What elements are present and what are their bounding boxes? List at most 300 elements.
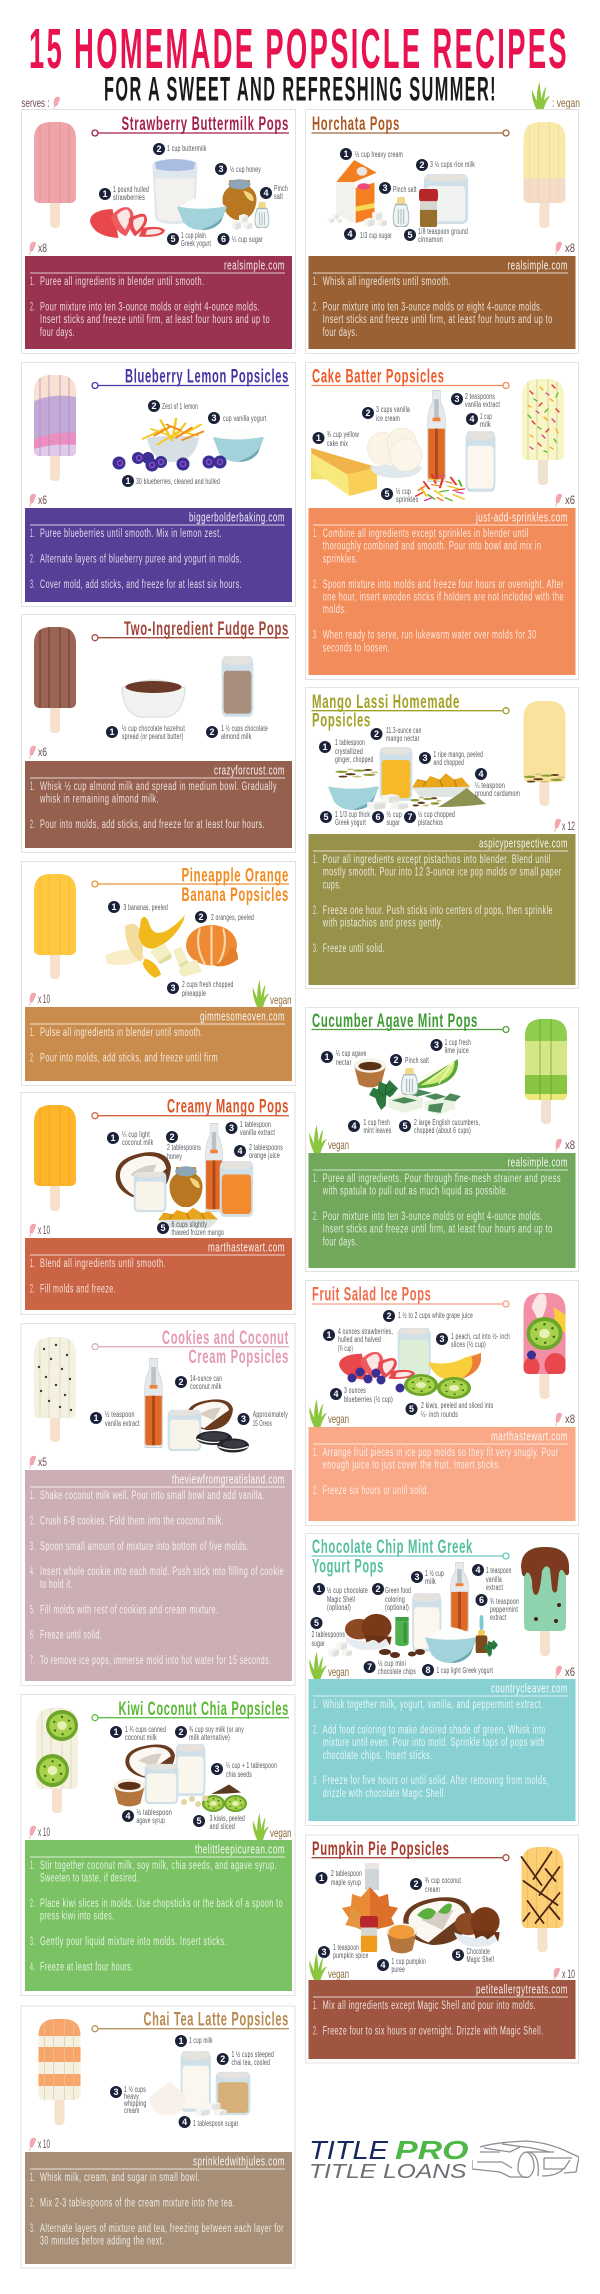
ingredient illustration	[122, 656, 253, 717]
ingredient 1	[110, 1725, 166, 1742]
heading	[92, 113, 289, 136]
ingredient 4: 1/3 cup sugar	[360, 231, 392, 240]
vegan tag: vegan	[328, 1967, 349, 1981]
ingredient 4: 3 ounces	[344, 1386, 366, 1395]
ingredient 2: milk alternative)	[189, 1733, 230, 1742]
ingredient 2: (optional)	[385, 1603, 409, 1612]
instructions: 1.	[30, 1027, 35, 1039]
heading: Pineapple Orange	[182, 865, 289, 887]
instructions: Alternate layers of mixture and tea, freezing between each layer for	[40, 2223, 284, 2235]
instructions: Puree blueberries until smooth. Mix in lemon zest.	[40, 528, 222, 540]
heading	[92, 2009, 289, 2032]
ingredient 3: 3	[218, 164, 224, 174]
ingredient 3: pumpkin spice	[333, 1951, 369, 1960]
ingredient 5	[404, 227, 468, 244]
ingredient 4: salt	[274, 192, 283, 201]
heading	[92, 1327, 289, 1368]
ingredient 2: 2	[393, 1055, 399, 1065]
instructions	[308, 1153, 576, 1268]
servings	[29, 1455, 47, 1469]
ingredient 3: 3	[414, 1572, 420, 1582]
instructions: realsimple.com	[224, 258, 285, 272]
instructions: Freeze until solid.	[323, 943, 385, 955]
ingredient 4: milk	[480, 420, 491, 429]
ingredient 2: Pinch salt	[405, 1056, 429, 1065]
ingredient 1: 2 tablespoon	[331, 1869, 362, 1878]
vegan tag: vegan	[328, 1412, 349, 1426]
ingredient 3: 1 ½ cup	[425, 1569, 444, 1578]
ingredient illustration	[112, 418, 264, 472]
ingredient 2: cream	[425, 1885, 440, 1894]
ingredient 3	[167, 980, 234, 998]
ingredient 1: ginger, chopped	[335, 755, 374, 764]
instructions: 2.	[313, 579, 318, 591]
panel: Chocolate Chip Mint Greek Yogurt Pops	[306, 1534, 578, 1826]
vegan tag	[309, 1652, 349, 1679]
ingredient 2: Zest of 1 lemon	[162, 402, 198, 411]
ingredient 2: 2	[198, 912, 204, 922]
vegan tag	[309, 1953, 349, 1981]
ingredient 1: 30 blueberries, cleaned and hulled	[136, 477, 220, 486]
ingredient 5: 5	[455, 1950, 461, 1960]
instructions: 4.	[30, 1566, 35, 1578]
ingredient 4	[234, 1143, 283, 1160]
ingredient 1: spread (or peanut butter)	[122, 732, 184, 741]
ingredient 3	[110, 2085, 146, 2115]
instructions	[308, 1427, 576, 1521]
ingredient 5: Magic Shell	[466, 1955, 494, 1964]
ingredient 3: 1 tablespoon	[240, 1120, 271, 1129]
card background	[306, 362, 578, 680]
instructions: 7.	[30, 1655, 35, 1667]
heading	[92, 1698, 289, 1721]
logo: Title Pro Title Loans	[309, 2135, 579, 2183]
instructions	[25, 1007, 292, 1081]
card background	[306, 1280, 578, 1526]
panel: Two-Ingredient Fudge Pops	[22, 614, 296, 852]
instructions: 3.	[30, 2223, 35, 2235]
instructions	[308, 1679, 576, 1821]
ingredient 3: 1 cup fresh	[445, 1038, 471, 1047]
heading	[312, 691, 509, 732]
servings	[555, 241, 575, 255]
ingredient 7: ½ cup mini	[378, 1659, 406, 1668]
ingredient 1	[108, 901, 168, 913]
ingredient 4: 4	[263, 188, 269, 198]
instructions: Crush 6-8 cookies. Fold them into the coconut milk.	[40, 1515, 224, 1527]
ingredient 6: sugar	[386, 818, 400, 827]
ingredient 6: ½ cup	[386, 810, 402, 819]
instructions: 3.	[30, 579, 35, 591]
ingredient 1: 1	[125, 476, 131, 486]
ingredient 5	[157, 1220, 224, 1237]
instructions: 2.	[313, 1485, 318, 1497]
ingredient 1: 4 ounces strawberries,	[338, 1327, 393, 1336]
instructions: Freeze until solid.	[40, 1630, 102, 1642]
ingredient 1	[323, 1327, 393, 1353]
ingredient 1: crystallized	[335, 747, 363, 756]
ingredient 5	[310, 1617, 345, 1648]
servings: x6	[38, 493, 47, 507]
ingredient 1: 1	[319, 1873, 324, 1883]
ingredient illustration	[328, 747, 486, 810]
servings	[29, 1223, 50, 1237]
instructions: 3.	[30, 1936, 35, 1948]
popsicle	[525, 1019, 567, 1124]
card background	[21, 1694, 295, 1996]
instructions: theviewfromgreatisland.com	[172, 1472, 285, 1486]
instructions: 3.	[313, 1775, 318, 1787]
ingredient illustration	[328, 1562, 498, 1663]
ingredient 6: 6	[221, 234, 226, 244]
ingredient 4: 4	[469, 414, 475, 424]
instructions: 1.	[313, 1447, 318, 1459]
ingredient 3: 15 Oreos	[253, 1419, 272, 1428]
ingredient 1: nectar	[336, 1058, 352, 1067]
ingredient 3: milk	[425, 1577, 436, 1586]
ingredient 4	[377, 1957, 426, 1974]
ingredient 2	[390, 1054, 429, 1066]
ingredient 3	[238, 1410, 288, 1428]
servings	[554, 819, 575, 833]
instructions: whisk in remaining almond milk.	[39, 794, 159, 806]
ingredient 3: and chopped	[434, 758, 464, 767]
ingredient 2: 3 cups vanilla	[376, 405, 410, 414]
ingredient 1: 1	[111, 902, 117, 912]
instructions: to hold it.	[40, 1579, 73, 1591]
popsicle	[38, 2019, 80, 2125]
instructions: Pulse all ingredients in blender until smooth.	[40, 1027, 203, 1039]
ingredient 3: 1 peach, cut into ½- inch	[451, 1332, 510, 1341]
ingredient 1	[99, 185, 149, 202]
ingredient 4: 4	[380, 1960, 386, 1970]
ingredient 1: hulled and halved	[338, 1335, 381, 1344]
ingredient 2: 2	[209, 727, 215, 737]
instructions: cups.	[323, 879, 342, 891]
popsicle	[34, 627, 76, 733]
ingredient 3	[430, 1038, 471, 1055]
ingredient 5	[320, 810, 370, 827]
instructions: 1.	[30, 528, 35, 540]
ingredient 5: sugar	[312, 1639, 325, 1648]
heading: Mango Lassi Homemade	[312, 691, 460, 713]
instructions: Whisk all ingredients until smooth.	[323, 276, 451, 288]
ingredient 2: 2	[169, 1132, 175, 1142]
ingredient 4: ¼ teaspoon	[475, 781, 505, 790]
ingredient 3: 3	[434, 1040, 439, 1050]
ingredient 4	[344, 228, 392, 240]
ingredient 3: 1 ripe mango, peeled	[434, 750, 483, 759]
ingredient 5: 5	[402, 1121, 408, 1131]
ingredient illustration	[311, 390, 495, 501]
instructions: 2.	[30, 553, 35, 565]
ingredient 5: 5	[409, 1404, 414, 1414]
ingredient 1: ¼ cup light	[122, 1130, 150, 1139]
servings: x8	[565, 241, 575, 255]
instructions: Insert whole cookie into each mold. Push stick into filling of cookie	[40, 1566, 284, 1578]
ingredient 3: lime juice	[445, 1046, 469, 1055]
ingredient illustration	[90, 159, 269, 238]
ingredient 3: 3	[422, 753, 428, 763]
instructions: Sweeten to taste, if desired.	[40, 1873, 139, 1885]
ingredient 1: 1	[343, 149, 349, 159]
servings: x8	[565, 1412, 575, 1426]
ingredient 4: 4	[347, 229, 353, 239]
ingredient 5: Greek yogurt	[181, 239, 211, 248]
ingredient 1: cake mix	[327, 439, 348, 448]
ingredient 3: 3	[321, 1947, 327, 1957]
panel: Mango Lassi Homemade Popsicles	[306, 688, 578, 988]
instructions: Alternate layers of blueberry puree and yogurt in molds.	[40, 553, 242, 565]
instructions: Cover mold, add sticks, and freeze for at least six hours.	[40, 579, 242, 591]
ingredient 4: ½ tablespoon	[136, 1808, 172, 1817]
instructions: 1.	[313, 2000, 318, 2012]
ingredient illustration	[342, 1863, 502, 1953]
instructions: Gently pour liquid mixture into molds. Insert sticks.	[40, 1936, 227, 1948]
panel: Chai Tea Latte Popsicles	[21, 2006, 295, 2268]
ingredient 4: 1 tablespoon sugar	[193, 2119, 239, 2128]
ingredient 7	[364, 1659, 416, 1676]
logo: Title Pro Title Loans: TITLE LOANS	[309, 2161, 467, 2183]
panel: Cookies and Coconut Cream Popsicles	[21, 1324, 295, 1686]
ingredient 2: 2 oranges, peeled	[211, 913, 254, 922]
instructions: chocolate chips. Insert sticks.	[323, 1750, 433, 1762]
ingredient 1: 1	[178, 2036, 184, 2046]
instructions	[308, 508, 576, 675]
instructions: 2.	[313, 1724, 318, 1736]
ingredient 2	[206, 724, 268, 741]
ingredient 4: 1 cup fresh	[364, 1118, 390, 1127]
ingredient 3: 2 cups fresh chopped	[182, 980, 234, 989]
ingredient 4: 1 cup pumpkin	[392, 1957, 426, 1966]
instructions: Mix 2-3 tablespoons of the cream mixture into the tea.	[40, 2197, 235, 2209]
ingredient 1	[316, 1869, 362, 1887]
ingredient 6	[476, 1594, 519, 1622]
instructions: 2.	[313, 1211, 318, 1223]
ingredient 3: 3	[229, 1123, 234, 1133]
ingredient 2: 3 ½ cups rice milk	[430, 160, 475, 169]
ingredient 7: pistachios	[418, 818, 443, 827]
instructions	[25, 2152, 292, 2264]
ingredient 4: 4	[125, 1811, 131, 1821]
instructions: 6.	[30, 1630, 35, 1642]
ingredient 2: Green food	[385, 1586, 411, 1595]
ingredient 4: agave syrup	[136, 1816, 165, 1825]
servings	[553, 1967, 575, 1981]
ingredient 1: (optional)	[327, 1603, 351, 1612]
panel: Pineapple Orange Banana Popsicles	[22, 862, 296, 1086]
card background	[21, 2006, 295, 2268]
instructions: Pour into molds, add sticks, and freeze until firm	[40, 1052, 218, 1064]
ingredient 5	[167, 231, 211, 248]
ingredient 5: 6 cups slightly	[172, 1220, 207, 1229]
ingredient illustration	[144, 1358, 249, 1452]
popsicle	[524, 1293, 566, 1399]
ingredient 3	[318, 1943, 369, 1960]
instructions: 3.	[30, 1541, 35, 1553]
ingredient 2: 2	[178, 1377, 184, 1387]
ingredient 3: 1 teaspoon	[333, 1943, 359, 1952]
ingredient 1: 1	[102, 189, 108, 199]
ingredient 4	[472, 1564, 512, 1592]
instructions: Pour into molds, add sticks, and freeze for at least four hours.	[40, 819, 265, 831]
instructions: 1.	[30, 2172, 35, 2184]
instructions: seconds to loosen.	[323, 642, 390, 654]
servings	[555, 493, 575, 507]
ingredient 1: ¾ cup yellow	[327, 430, 359, 439]
ingredient 1	[312, 430, 359, 448]
ingredient 1	[319, 738, 374, 764]
ingredient 5: 5	[196, 1816, 202, 1826]
ingredient 4: vanilla	[486, 1575, 502, 1584]
ingredient 5: Chocolate	[466, 1947, 490, 1956]
ingredient 4: 4	[237, 1146, 243, 1156]
vegan tag: vegan	[328, 1138, 349, 1152]
ingredient 2: 2	[419, 160, 425, 170]
servings: x5	[38, 1455, 47, 1469]
ingredient 1: 1 cup milk	[189, 2036, 213, 2045]
heading: Cake Batter Popsicles	[312, 366, 445, 388]
ingredient 2: almond milk	[221, 732, 252, 741]
card background	[306, 1534, 578, 1826]
servings	[555, 1138, 575, 1152]
servings: x 10	[38, 1223, 50, 1237]
instructions: 1.	[30, 781, 35, 793]
panel: Cake Batter Popsicles	[306, 362, 578, 680]
heading	[312, 1536, 509, 1578]
ingredient 4: mint leaves	[364, 1126, 392, 1135]
ingredient 2	[370, 726, 422, 743]
ingredient 2: coloring	[385, 1595, 405, 1604]
heading: Chai Tea Latte Popsicles	[144, 2009, 289, 2031]
legend: serves: serves :	[22, 96, 50, 110]
instructions: 2.	[30, 302, 35, 314]
instructions: 2.	[30, 819, 35, 831]
ingredient 1: ½ cup chocolate	[327, 1586, 368, 1595]
servings	[29, 493, 47, 507]
ingredient 2: 11.3-ounce can	[386, 726, 422, 735]
ingredient 1: strawberries	[113, 193, 145, 202]
ingredient 6	[372, 810, 402, 827]
instructions: press kiwi into sides.	[40, 1911, 115, 1923]
ingredient 2: 2	[365, 408, 371, 418]
ingredient 1	[122, 475, 220, 487]
ingredient 2: 2	[178, 1727, 184, 1737]
servings	[29, 1825, 50, 1839]
panel: Pumpkin Pie Popsicles	[306, 1835, 578, 2063]
ingredient 4: puree	[392, 1965, 405, 1974]
popsicle	[522, 379, 564, 485]
servings	[555, 1412, 575, 1426]
ingredient 3: 3	[241, 1414, 246, 1424]
instructions: 1.	[30, 276, 35, 288]
ingredient 2: 2	[374, 729, 379, 739]
instructions: Whisk milk, cream, and sugar in small bowl.	[40, 2172, 200, 2184]
ingredient 3: ¼ cup + 1 tablespoon	[226, 1761, 277, 1770]
ingredient 5: 5	[314, 1618, 319, 1628]
ingredient 4: 4	[182, 2117, 187, 2127]
ingredient 2: 14-ounce can	[190, 1374, 222, 1383]
ingredient 2	[153, 143, 207, 155]
ingredient 1: 1	[324, 1052, 330, 1062]
ingredient 3: 3	[170, 983, 176, 993]
ingredient 1: coconut milk	[122, 1138, 154, 1147]
ingredient 5: 5	[407, 230, 413, 240]
ingredient 5	[399, 1118, 480, 1135]
vegan tag: vegan	[328, 1665, 349, 1679]
servings	[29, 241, 47, 255]
ingredient 5: 1 1/3 cup thick	[335, 810, 370, 819]
ingredient 1	[175, 2035, 213, 2047]
card background	[21, 1092, 295, 1314]
instructions: molds.	[323, 604, 347, 616]
ingredient 3	[419, 750, 483, 767]
heading: Horchata Pops	[312, 113, 400, 135]
ingredient 3: vanilla extract	[465, 400, 500, 409]
instructions: 2.	[30, 1515, 35, 1527]
ingredient 1: ½ cup heavy cream	[355, 150, 403, 159]
ingredient 1: maple syrup	[331, 1878, 361, 1887]
ingredient 3: Approximately	[253, 1410, 288, 1419]
ingredient 1	[106, 724, 185, 741]
ingredient 1	[340, 148, 403, 160]
heading: Pumpkin Pie Popsicles	[312, 1838, 450, 1860]
ingredient 6: peppermint	[490, 1605, 518, 1614]
ingredient 2: 2	[386, 1311, 392, 1321]
ingredient 2: ¾ cup soy milk (or any	[189, 1725, 244, 1734]
ingredient 3	[436, 1332, 510, 1349]
instructions	[25, 256, 292, 349]
ingredient 2: 2	[413, 1879, 419, 1889]
panel: Cucumber Agave Mint Pops	[306, 1008, 578, 1272]
ingredient 1: coconut milk	[125, 1733, 157, 1742]
card background	[22, 362, 296, 606]
instructions: 2.	[313, 905, 318, 917]
instructions: 1.	[313, 1173, 318, 1185]
instructions: Place kiwi slices in molds. Use chopsticks or the back of a spoon to	[40, 1898, 283, 1910]
ingredient 5: 2 large English cucumbers,	[414, 1118, 480, 1127]
panel: Horchata Pops	[306, 110, 578, 354]
ingredient 1: Magic Shell	[327, 1595, 355, 1604]
servings: x8	[565, 1138, 575, 1152]
popsicle	[521, 1547, 569, 1656]
ingredient 4	[260, 184, 288, 201]
ingredient illustration	[114, 1744, 247, 1812]
ingredient 3	[451, 392, 500, 409]
ingredient 4	[179, 2116, 239, 2128]
ingredient 3	[379, 182, 417, 194]
ingredient 1	[90, 1410, 140, 1428]
ingredient 2: 2 tablespoons	[167, 1143, 201, 1152]
ingredient 5: 5	[160, 1223, 166, 1233]
instructions: realsimple.com	[508, 1156, 568, 1170]
servings: x6	[565, 493, 575, 507]
heading: Banana Popsicles	[182, 884, 289, 906]
ingredient 7: ½ cup chopped	[418, 810, 455, 819]
panel: Blueberry Lemon Popsicles	[22, 362, 296, 606]
ingredient 5: 5	[323, 812, 329, 822]
ingredient illustration	[328, 160, 468, 227]
ingredient 1	[321, 1049, 367, 1067]
servings	[29, 745, 47, 759]
ingredient 1: 1	[322, 742, 328, 752]
ingredient 2	[175, 1725, 244, 1742]
card background	[306, 110, 578, 354]
instructions: marthastewart.com	[208, 1240, 285, 1254]
ingredient 2: honey	[167, 1152, 182, 1161]
ingredient 4: 1 cup	[480, 412, 492, 421]
heading: Chocolate Chip Mint Greek	[312, 1536, 473, 1558]
